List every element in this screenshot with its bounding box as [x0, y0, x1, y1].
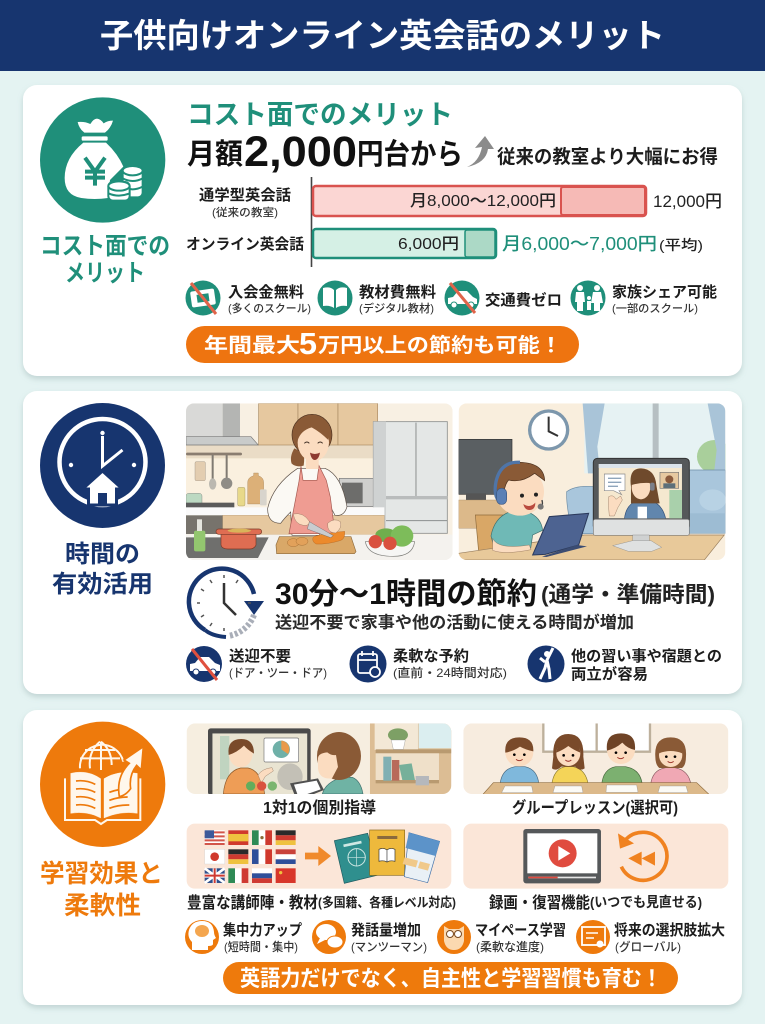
icon: flexible booking: [350, 646, 386, 682]
left label: cost merit: コスト面での: [40, 233, 170, 260]
text: family share: (一部のスクール): [612, 301, 698, 315]
text: future options: (グローバル): [615, 939, 681, 954]
label: online: オンライン英会話: [186, 236, 304, 253]
caption: one-on-one: 1対1の個別指導: [263, 798, 376, 817]
value: online: 月6,000〜7,000円: [502, 234, 657, 254]
illustrations: one-on-one and materials: [187, 723, 451, 889]
illustration: mother cooking: [186, 403, 453, 560]
headline: time saved: [275, 578, 715, 611]
illustration: one-on-one lesson: [187, 723, 451, 797]
tile: instructors and materials: [187, 824, 451, 889]
books: [334, 830, 440, 883]
headline price: 2,000: [244, 128, 357, 176]
icon: free materials: [318, 280, 352, 316]
caption: instructors and materials: 豊富な講師陣・教材: [187, 893, 318, 912]
tile: recording and review: [463, 824, 728, 889]
text: concentration: 集中力アップ: [223, 921, 302, 939]
text: my pace: マイペース学習: [475, 921, 566, 939]
headline price: [187, 128, 463, 176]
text: no pick-up: (ドア・ツー・ドア): [229, 666, 327, 680]
text: my pace: [475, 921, 566, 954]
bar: online: [313, 229, 496, 258]
text: family share: 家族シェア可能: [612, 283, 717, 301]
text: concentration: [223, 921, 302, 954]
text: other activities: 他の習い事や宿題との: [571, 647, 722, 665]
panel: learning effect: [23, 710, 742, 1005]
icon: clock with arrow: [189, 569, 264, 637]
callout: yearly savings: 年間最大: [204, 334, 300, 357]
icon: up arrow: [467, 136, 494, 167]
bar: classroom: [313, 186, 646, 216]
icon: rewind: [618, 832, 667, 880]
icon: owl: [437, 920, 471, 954]
arrow: [305, 846, 331, 866]
subhead: 従来の教室より大幅にお得: [497, 146, 718, 168]
text: flexible booking: (直前・24時間対応): [393, 665, 507, 680]
caption: instructors and materials: (多国籍、各種レベル対応): [318, 895, 456, 910]
icon: family: [570, 280, 606, 316]
headline: time saved: (通学・準備時間): [541, 582, 715, 607]
icon: book and globe: [40, 722, 165, 847]
text: flexible booking: 柔軟な予約: [393, 647, 469, 665]
text: other activities: 両立が容易: [571, 665, 648, 683]
left label: time: 時間の: [65, 541, 140, 568]
text: no pick-up: [229, 648, 327, 680]
title banner: 子供向けオンライン英会話のメリット: [100, 17, 665, 54]
icon: no pick-up: [186, 646, 222, 682]
text: other activities: [571, 647, 722, 683]
value: classroom: 12,000円: [653, 192, 722, 211]
text: no pick-up: 送迎不要: [229, 648, 291, 665]
subtext: time saved: 送迎不要で家事や他の活動に使える時間が増加: [275, 612, 634, 632]
text: my pace: (柔軟な進度): [476, 939, 544, 954]
bar: classroom: 月8,000〜12,000円: [410, 193, 556, 210]
icon: no travel cost: [444, 280, 480, 316]
heading: cost merit: コスト面でのメリット: [187, 100, 453, 130]
caption: recording: 録画・復習機能: [489, 893, 590, 912]
text: speaking: [351, 921, 427, 954]
left label: time: 有効活用: [52, 571, 153, 598]
icon: speaking: [312, 920, 346, 954]
text: no travel cost: 交通費ゼロ: [485, 291, 562, 309]
headline price: 円台から: [357, 138, 463, 171]
left label: cost merit: [40, 233, 170, 287]
value: online: (平均): [659, 237, 703, 253]
text: concentration: (短時間・集中): [224, 939, 298, 954]
callout: yearly savings: 万円以上の節約も可能！: [318, 334, 562, 357]
text: future options: 将来の選択肢拡大: [614, 921, 725, 939]
icon: certificate: [576, 920, 610, 954]
text: speaking: (マンツーマン): [351, 940, 427, 954]
caption: group lesson: グループレッスン(選択可): [512, 798, 678, 817]
text: family share: [612, 283, 717, 315]
headline price: 月額: [187, 138, 243, 171]
label: classroom school: (従来の教室): [212, 205, 278, 219]
caption: instructors and materials: [187, 893, 456, 912]
callout: yearly savings: [186, 326, 579, 363]
icon: clock and home: [40, 403, 165, 528]
callout: yearly savings: 5: [299, 326, 317, 361]
illustrations: group lesson and recording: [463, 723, 728, 889]
icon: other activities: [528, 646, 564, 682]
left label: time: [52, 541, 153, 598]
text: free materials: [359, 283, 436, 315]
title banner: [0, 0, 765, 71]
kid 3: [602, 733, 642, 785]
label: classroom school: 通学型英会話: [199, 186, 291, 204]
bar: online: 6,000円: [398, 236, 459, 253]
text: no admission fee: (多くのスクール): [228, 301, 311, 315]
caption: recording: (いつでも見直せる): [590, 894, 702, 910]
text: speaking: 発話量増加: [351, 921, 421, 939]
left label: learning effect: 柔軟性: [64, 892, 141, 920]
left label: cost merit: メリット: [65, 260, 145, 287]
icon: video player: [523, 829, 601, 883]
flags: [205, 830, 296, 883]
label: classroom school: [199, 186, 291, 219]
text: future options: [614, 921, 725, 954]
illustration: group lesson: [463, 723, 728, 795]
text: no admission fee: 入会金無料: [228, 283, 304, 301]
kid 4: [651, 737, 691, 785]
text: flexible booking: [393, 647, 507, 680]
icon: no admission fee: [186, 280, 220, 316]
panel: time: [23, 391, 742, 694]
left label: learning effect: [40, 860, 163, 920]
kid 1: [500, 737, 539, 785]
bar chart: price comparison: [186, 177, 722, 267]
icon: concentration: [185, 920, 219, 954]
icon: money bag: [40, 97, 165, 223]
text: free materials: (デジタル教材): [359, 301, 434, 315]
text: no admission fee: [228, 283, 311, 315]
headline: time saved: 30分〜1時間の節約: [275, 578, 537, 611]
callout: autonomy and habits: 英語力だけでなく、自主性と学習習慣も育む！: [240, 966, 662, 991]
caption: recording: [489, 893, 702, 912]
panel: cost merit: [23, 85, 742, 376]
illustration: child online lesson at home: [459, 403, 732, 560]
left label: learning effect: 学習効果と: [40, 860, 163, 888]
kid 2: [552, 734, 588, 785]
text: free materials: 教材費無料: [359, 283, 436, 301]
